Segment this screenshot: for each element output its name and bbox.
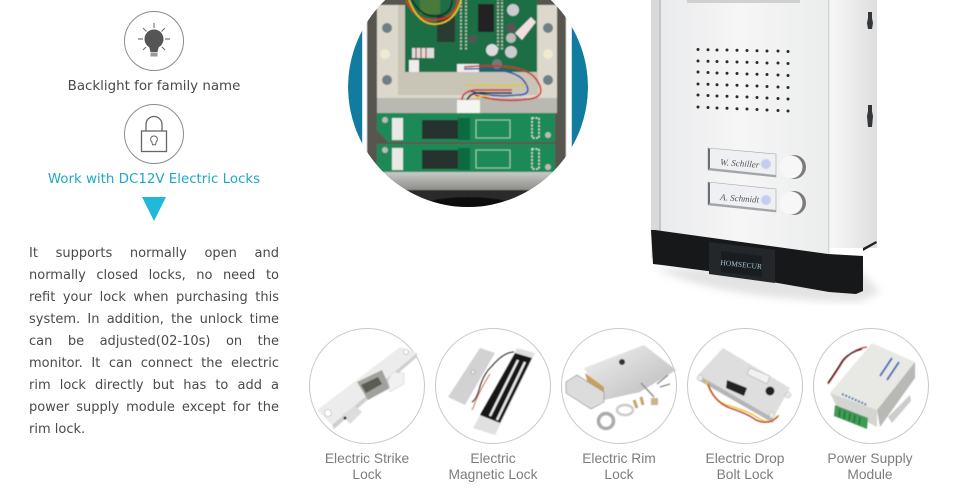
product: electric rim lock xyxy=(562,328,676,444)
label: electric strike lock: Lock xyxy=(352,467,382,482)
description text: refit your lock when purchasing this xyxy=(29,290,279,305)
name plate 2 xyxy=(708,182,776,212)
description text: can be adjusted(02-10s) on the xyxy=(29,334,279,349)
description text: rim lock. xyxy=(29,422,85,437)
label: electric magnetic lock: Electric xyxy=(470,451,516,466)
icon: backlight bulb xyxy=(124,12,184,70)
top green board xyxy=(405,0,537,72)
label: electric drop bolt lock: Bolt Lock xyxy=(717,467,773,482)
description text: normally closed locks, no need to xyxy=(29,268,279,283)
description text: It supports normally open and xyxy=(29,246,279,261)
label: electric rim lock: Lock xyxy=(604,467,634,482)
icon: padlock xyxy=(124,104,184,164)
name plate 1: W. Schiller xyxy=(720,157,760,170)
description text xyxy=(29,246,279,437)
photo: intercom door station xyxy=(651,0,880,302)
product: electric drop bolt lock xyxy=(688,328,802,444)
label: electric strike lock: Electric Strike xyxy=(325,451,409,466)
photo: circuit board circle xyxy=(348,0,588,220)
label: electric magnetic lock: Magnetic Lock xyxy=(449,467,538,482)
wires xyxy=(406,0,541,103)
description text: system. In addition, the unlock time xyxy=(29,312,279,327)
product: power supply module xyxy=(814,328,928,444)
call buttons xyxy=(780,155,806,215)
icon: down triangle xyxy=(142,197,166,221)
description text: rim lock directly but has to add a xyxy=(29,378,279,393)
relay boards xyxy=(377,113,555,172)
product: electric magnetic lock xyxy=(436,328,550,444)
brand badge xyxy=(720,251,762,277)
heading: electric locks: Work with DC12V Electric Locks xyxy=(48,172,260,187)
heading: backlight: Backlight for family name xyxy=(68,79,240,94)
speaker grille dots xyxy=(696,48,790,112)
name plate 1 xyxy=(708,148,776,177)
product: electric strike lock xyxy=(310,328,424,444)
label: electric rim lock: Electric Rim xyxy=(582,451,656,466)
brand badge: HOMSECUR xyxy=(720,258,762,271)
label: electric drop bolt lock: Electric Drop xyxy=(706,451,784,466)
label: power supply module: Power Supply xyxy=(827,451,913,466)
name plate 2: A. Schmidt xyxy=(719,192,760,205)
description text: power supply module except for the xyxy=(29,400,279,415)
description text: monitor. It can connect the electric xyxy=(29,356,279,371)
label: power supply module: Module xyxy=(847,467,893,482)
